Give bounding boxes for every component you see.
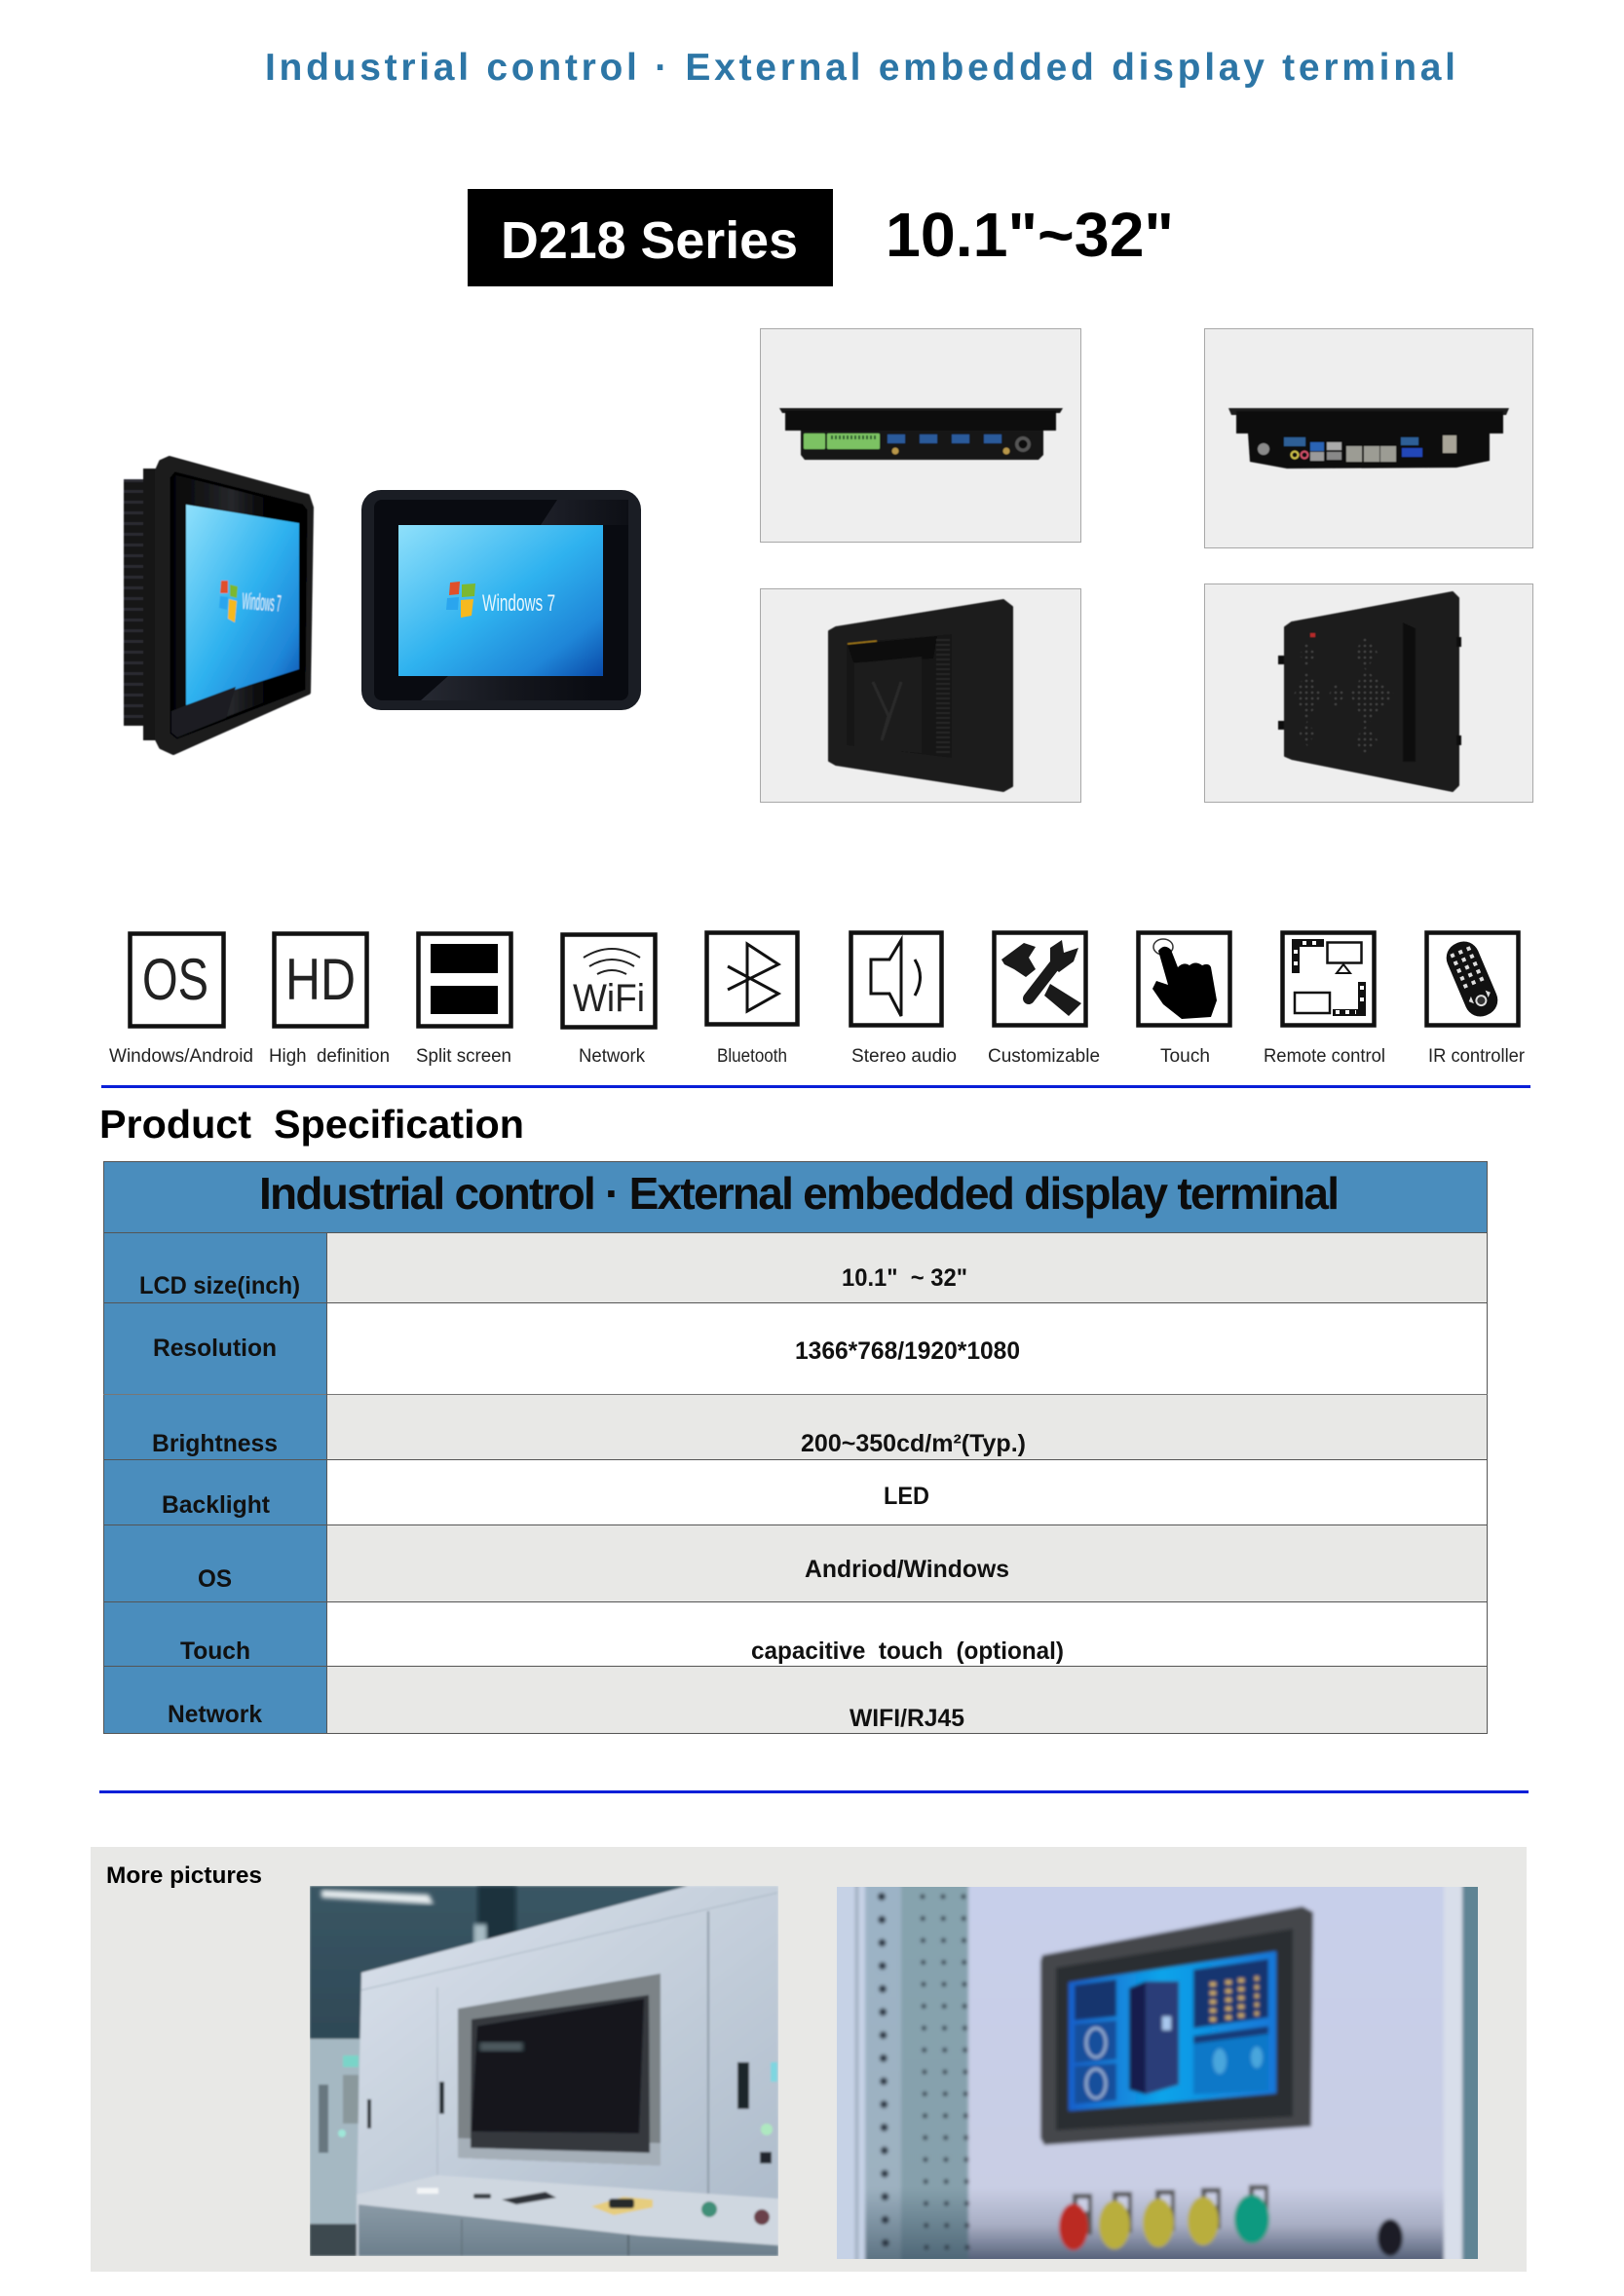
photo: rear view with vents [1204,584,1533,803]
icon: HD: HD [285,947,356,1012]
icon: OS [131,933,224,1027]
icon: customizable tools [994,933,1085,1025]
row values: 1366*768/1920*1080 [795,1337,1020,1365]
row labels: Touch [180,1637,250,1665]
icon: remote control [1282,933,1374,1025]
heading: product specification: Product Specification [99,1102,524,1147]
row labels: Backlight [162,1491,271,1519]
row labels: Resolution [153,1335,277,1362]
row labels [139,1272,300,1728]
icon: touch hand [1138,933,1229,1025]
row labels: LCD size(inch) [139,1272,300,1299]
icon: Bluetooth [707,933,797,1025]
heading: more pictures: More pictures [106,1863,262,1889]
feature labels: Touch [1160,1046,1210,1067]
row values: capacitive touch (optional) [751,1637,1064,1665]
feature labels: Split screen [416,1046,511,1067]
feature labels: High definition [269,1046,390,1067]
size range: 10.1"~32" [886,200,1174,270]
photo: connector side B [1204,329,1533,547]
panel: more pictures [91,1847,1527,2272]
title: Industrial control · External embedded display terminal [265,47,1455,89]
photo: connector side A [760,329,1081,542]
icon: WiFi [563,935,655,1027]
photo: panel with touch display [837,1887,1478,2259]
row values [751,1264,1064,1732]
icon: IR controller [1426,933,1518,1025]
icon: WiFi: WiFi [573,977,645,1020]
product image: angled front view [124,458,312,753]
row values: 200~350cd/m²(Typ.) [801,1430,1026,1457]
feature labels: Remote control [1264,1046,1385,1067]
row values: WIFI/RJ45 [850,1705,964,1732]
icon: HD [275,933,366,1027]
feature labels: Stereo audio [851,1046,957,1067]
row values: 10.1" ~ 32" [842,1264,967,1292]
product image: front view: Windows 7 [482,590,555,617]
table header: Industrial control · External embedded display terminal [259,1168,1340,1219]
icon: split screen [419,933,510,1027]
feature labels: IR controller [1428,1046,1526,1067]
series badge: D218 Series [501,211,798,270]
row values: LED [884,1483,929,1510]
icon: stereo audio [851,933,941,1025]
product image: angled front view: Windows 7 [242,588,282,618]
feature labels: Windows/Android [109,1046,253,1067]
row values: Andriod/Windows [805,1556,1009,1583]
photo: rear view with heatsink [760,588,1081,803]
series badge [468,189,833,286]
feature labels: Customizable [988,1046,1100,1067]
product image: front view [361,490,641,710]
feature labels: Bluetooth [717,1046,787,1067]
row labels: OS [198,1565,232,1593]
row labels: Brightness [152,1430,278,1457]
icon: OS: OS [142,947,208,1012]
row labels: Network [168,1701,262,1728]
feature labels: Network [579,1046,645,1067]
specification table [103,1161,1488,1734]
feature labels [109,1046,1526,1067]
photo: cabinet with monitor [310,1886,778,2256]
